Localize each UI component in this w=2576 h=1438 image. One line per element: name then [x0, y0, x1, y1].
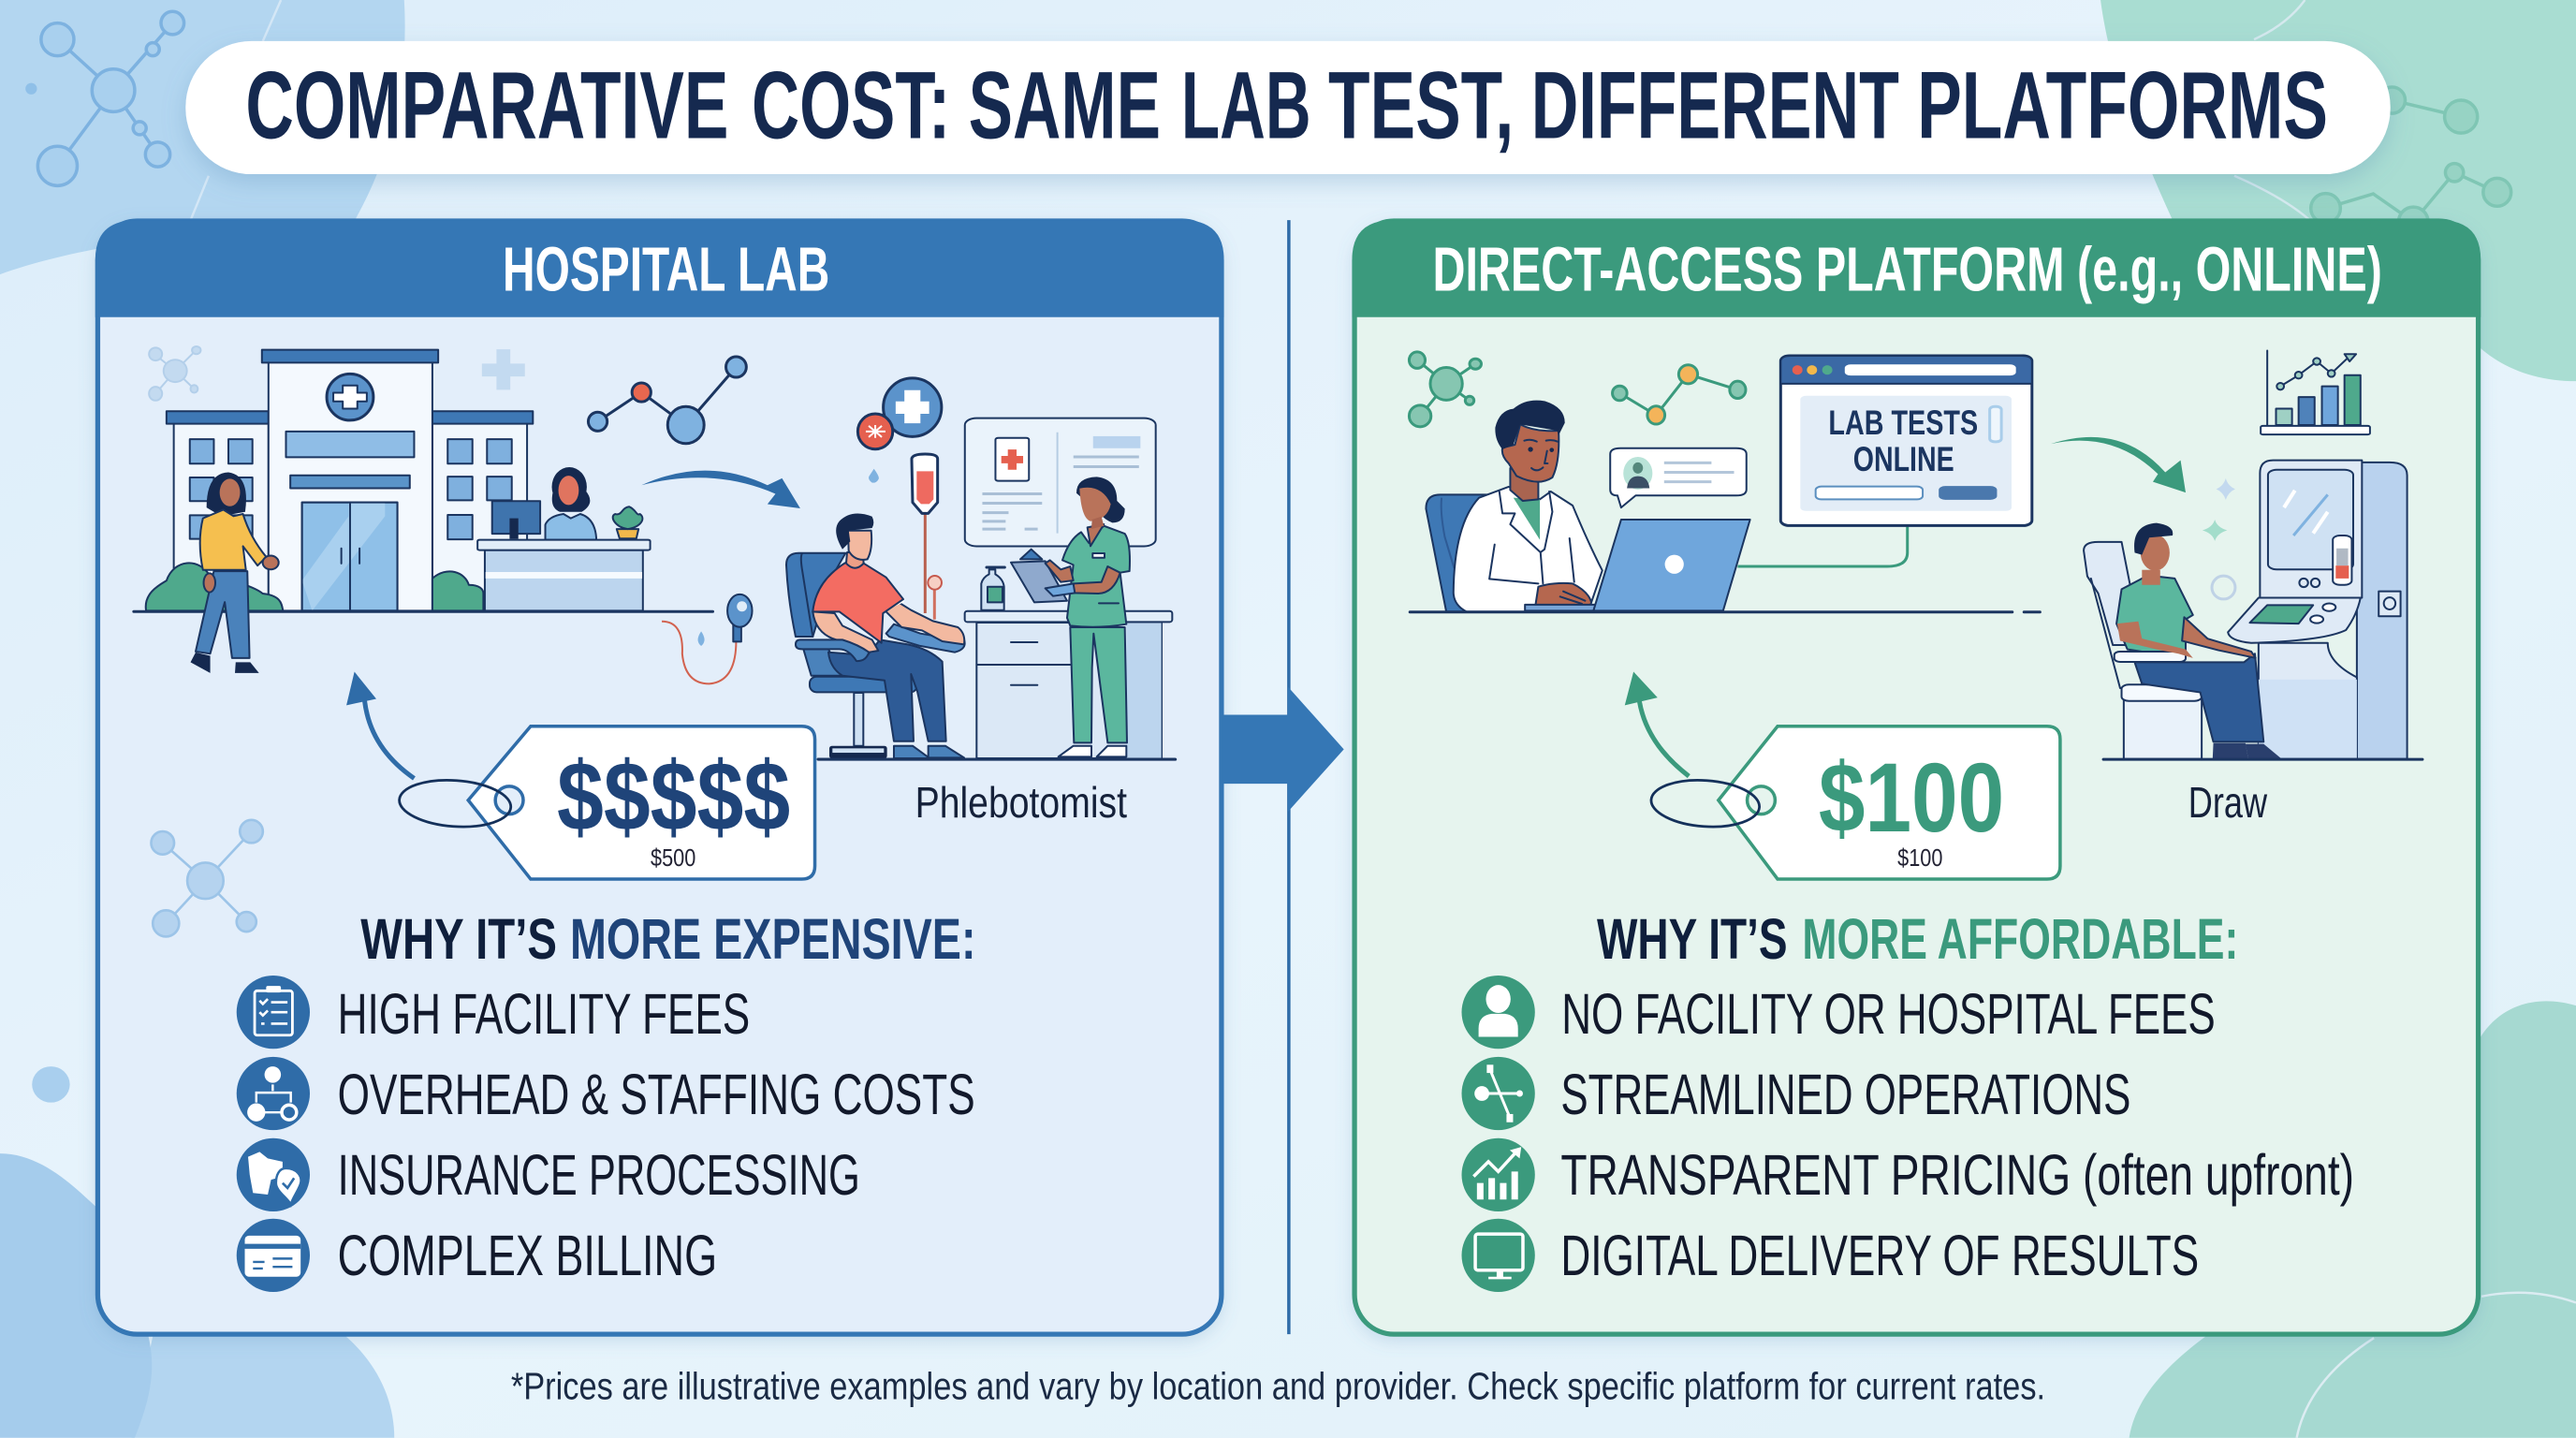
panel header: direct-access — [1352, 220, 2481, 317]
heading: why more expensive — [360, 907, 976, 972]
laptop — [1525, 520, 1750, 610]
text: lab tests online: LAB TESTS — [1828, 404, 1978, 442]
molecule — [588, 357, 746, 444]
faded molecule and cross — [149, 346, 525, 401]
decorative molecule top right — [2311, 87, 2511, 237]
heading: why more expensive: WHY IT’S — [360, 907, 557, 972]
icon: insurance — [237, 1138, 310, 1211]
divider line — [1288, 220, 1290, 1334]
label: draw: Draw — [2188, 778, 2267, 827]
price tag: hospital: $500 — [651, 844, 695, 872]
tubing and device — [662, 594, 753, 683]
list: direct access savings — [1462, 976, 2354, 1292]
text: digital delivery: DIGITAL DELIVERY OF RESULTS — [1560, 1224, 2199, 1288]
icon: person — [1462, 976, 1535, 1049]
label: phlebotomist: Phlebotomist — [915, 778, 1127, 827]
panel: direct-access platform — [1352, 220, 2481, 1334]
hospital building — [167, 350, 533, 610]
floor line right — [818, 758, 1176, 761]
heading: why more affordable: MORE AFFORDABLE: — [1802, 907, 2238, 972]
sparkles — [2203, 478, 2235, 599]
heading: why more affordable — [1597, 907, 2238, 972]
text: lab tests online — [1828, 404, 1978, 478]
floor line — [2103, 758, 2422, 761]
text: overhead: OVERHEAD & STAFFING COSTS — [338, 1063, 975, 1127]
curved green arrow — [2051, 437, 2186, 492]
illustration: patient, IV, desk and phlebotomist — [786, 454, 1175, 759]
title banner: TEST, — [1328, 51, 1514, 158]
desk and bottle — [965, 567, 1172, 758]
heading: why more affordable: WHY IT’S — [1597, 907, 1788, 972]
panel header: hospital lab — [95, 220, 1224, 317]
floor line patch — [818, 758, 1175, 761]
footnote: *Prices are illustrative examples and vary by location and provider. Check specific platform for current rates. — [511, 1364, 2045, 1407]
text: no facility: NO FACILITY OR HOSPITAL FEES — [1561, 982, 2216, 1047]
phlebotomist nurse — [1011, 477, 1130, 756]
text: complex billing: COMPLEX BILLING — [338, 1224, 717, 1288]
text: streamlined: STREAMLINED OPERATIONS — [1560, 1063, 2130, 1127]
text: high facility fees: HIGH FACILITY FEES — [338, 982, 750, 1047]
icon: credit card — [237, 1219, 310, 1292]
icon: rising chart — [1462, 1138, 1535, 1211]
reception desk — [477, 467, 651, 610]
curved arrow to phlebotomy — [641, 471, 800, 508]
list: hospital cost reasons — [237, 976, 975, 1292]
illustration: direct-access scene — [1409, 351, 2422, 776]
title banner: LAB — [1181, 51, 1311, 158]
kiosk — [2228, 461, 2408, 759]
desk line — [1410, 610, 2040, 613]
chat bubble — [1610, 448, 1747, 507]
bushes — [146, 563, 283, 610]
illustration: doctor — [1426, 401, 1603, 611]
molecule teal — [1409, 352, 1481, 427]
title banner: DIFFERENT — [1531, 51, 1899, 158]
price tag: direct access — [1649, 726, 2060, 879]
patient in chair — [786, 513, 965, 758]
medical bubbles and drops — [698, 378, 942, 646]
ground line — [134, 610, 713, 613]
price tag: direct access: $100 — [1897, 844, 1942, 872]
connector — [1737, 525, 1908, 566]
price tag: hospital: $$$$$ — [557, 741, 790, 851]
panel: hospital lab — [95, 220, 1224, 1334]
wall board — [965, 418, 1156, 546]
icon: network — [1462, 1057, 1535, 1130]
decorative molecule top left — [25, 11, 184, 185]
seated patient — [2084, 523, 2282, 759]
person walking — [191, 472, 279, 673]
icon: staffing hierarchy — [237, 1057, 310, 1130]
arrow from tag to scene — [346, 672, 414, 778]
title banner: PLATFORMS — [1917, 51, 2328, 158]
title banner: SAME — [969, 51, 1161, 158]
chart on shelf — [2261, 351, 2370, 434]
icon: clipboard — [237, 976, 310, 1049]
arrow from tag up — [1625, 638, 1689, 776]
heading: why more expensive: MORE EXPENSIVE: — [570, 907, 976, 972]
IV bag and tube — [869, 454, 942, 620]
title banner: COST: — [752, 51, 950, 158]
browser window — [1780, 356, 2032, 525]
illustration: hospital scene — [134, 346, 1176, 778]
title banner: COMPARATIVE — [245, 51, 728, 158]
panel header: hospital lab: HOSPITAL LAB — [503, 236, 829, 305]
price tag: direct access: $100 — [1819, 743, 2004, 853]
title banner — [185, 41, 2391, 174]
icon: monitor — [1462, 1219, 1535, 1292]
molecule orange — [1613, 365, 1746, 424]
text: lab tests online: ONLINE — [1853, 440, 1954, 478]
price tag: hospital — [398, 726, 815, 879]
faded molecule in panel — [151, 820, 263, 936]
text: insurance processing: INSURANCE PROCESSING — [338, 1143, 860, 1208]
center arrow — [1222, 687, 1344, 812]
